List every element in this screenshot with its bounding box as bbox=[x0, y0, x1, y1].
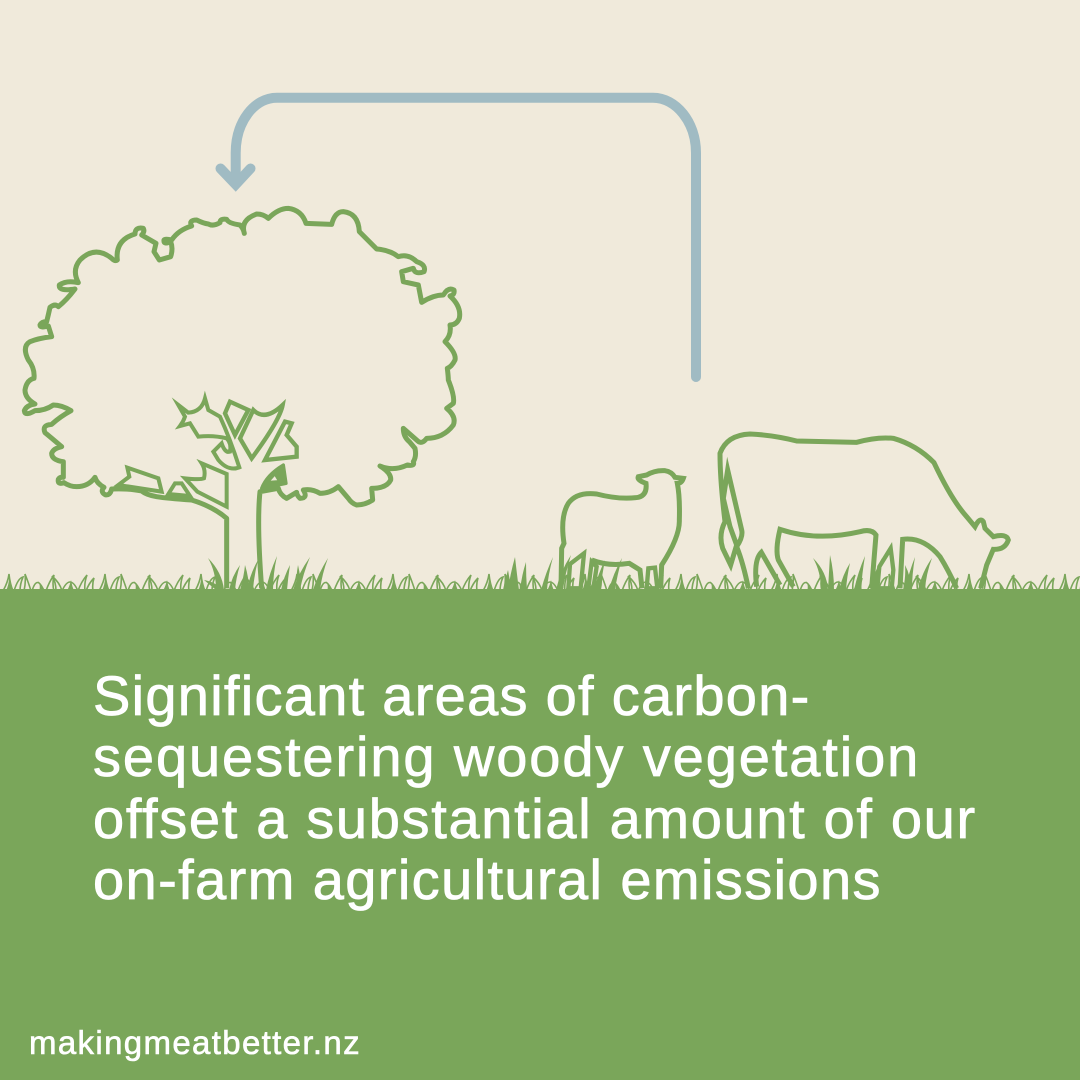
headline text: on-farm agricultural emissions bbox=[93, 848, 882, 911]
ground panel bbox=[0, 589, 1080, 1080]
headline text: sequestering woody vegetation bbox=[93, 725, 920, 788]
icon: sheep outline bbox=[561, 471, 683, 588]
arrow: loop from livestock to tree bbox=[220, 98, 696, 377]
icon: cow outline bbox=[720, 434, 1008, 588]
grass strip bbox=[0, 555, 1080, 591]
headline text: offset a substantial amount of our bbox=[93, 787, 977, 850]
website address: makingmeatbetter.nz bbox=[29, 1024, 361, 1061]
icon: tree outline bbox=[24, 208, 460, 588]
headline text: Significant areas of carbon- bbox=[93, 664, 811, 727]
headline text bbox=[93, 664, 977, 911]
